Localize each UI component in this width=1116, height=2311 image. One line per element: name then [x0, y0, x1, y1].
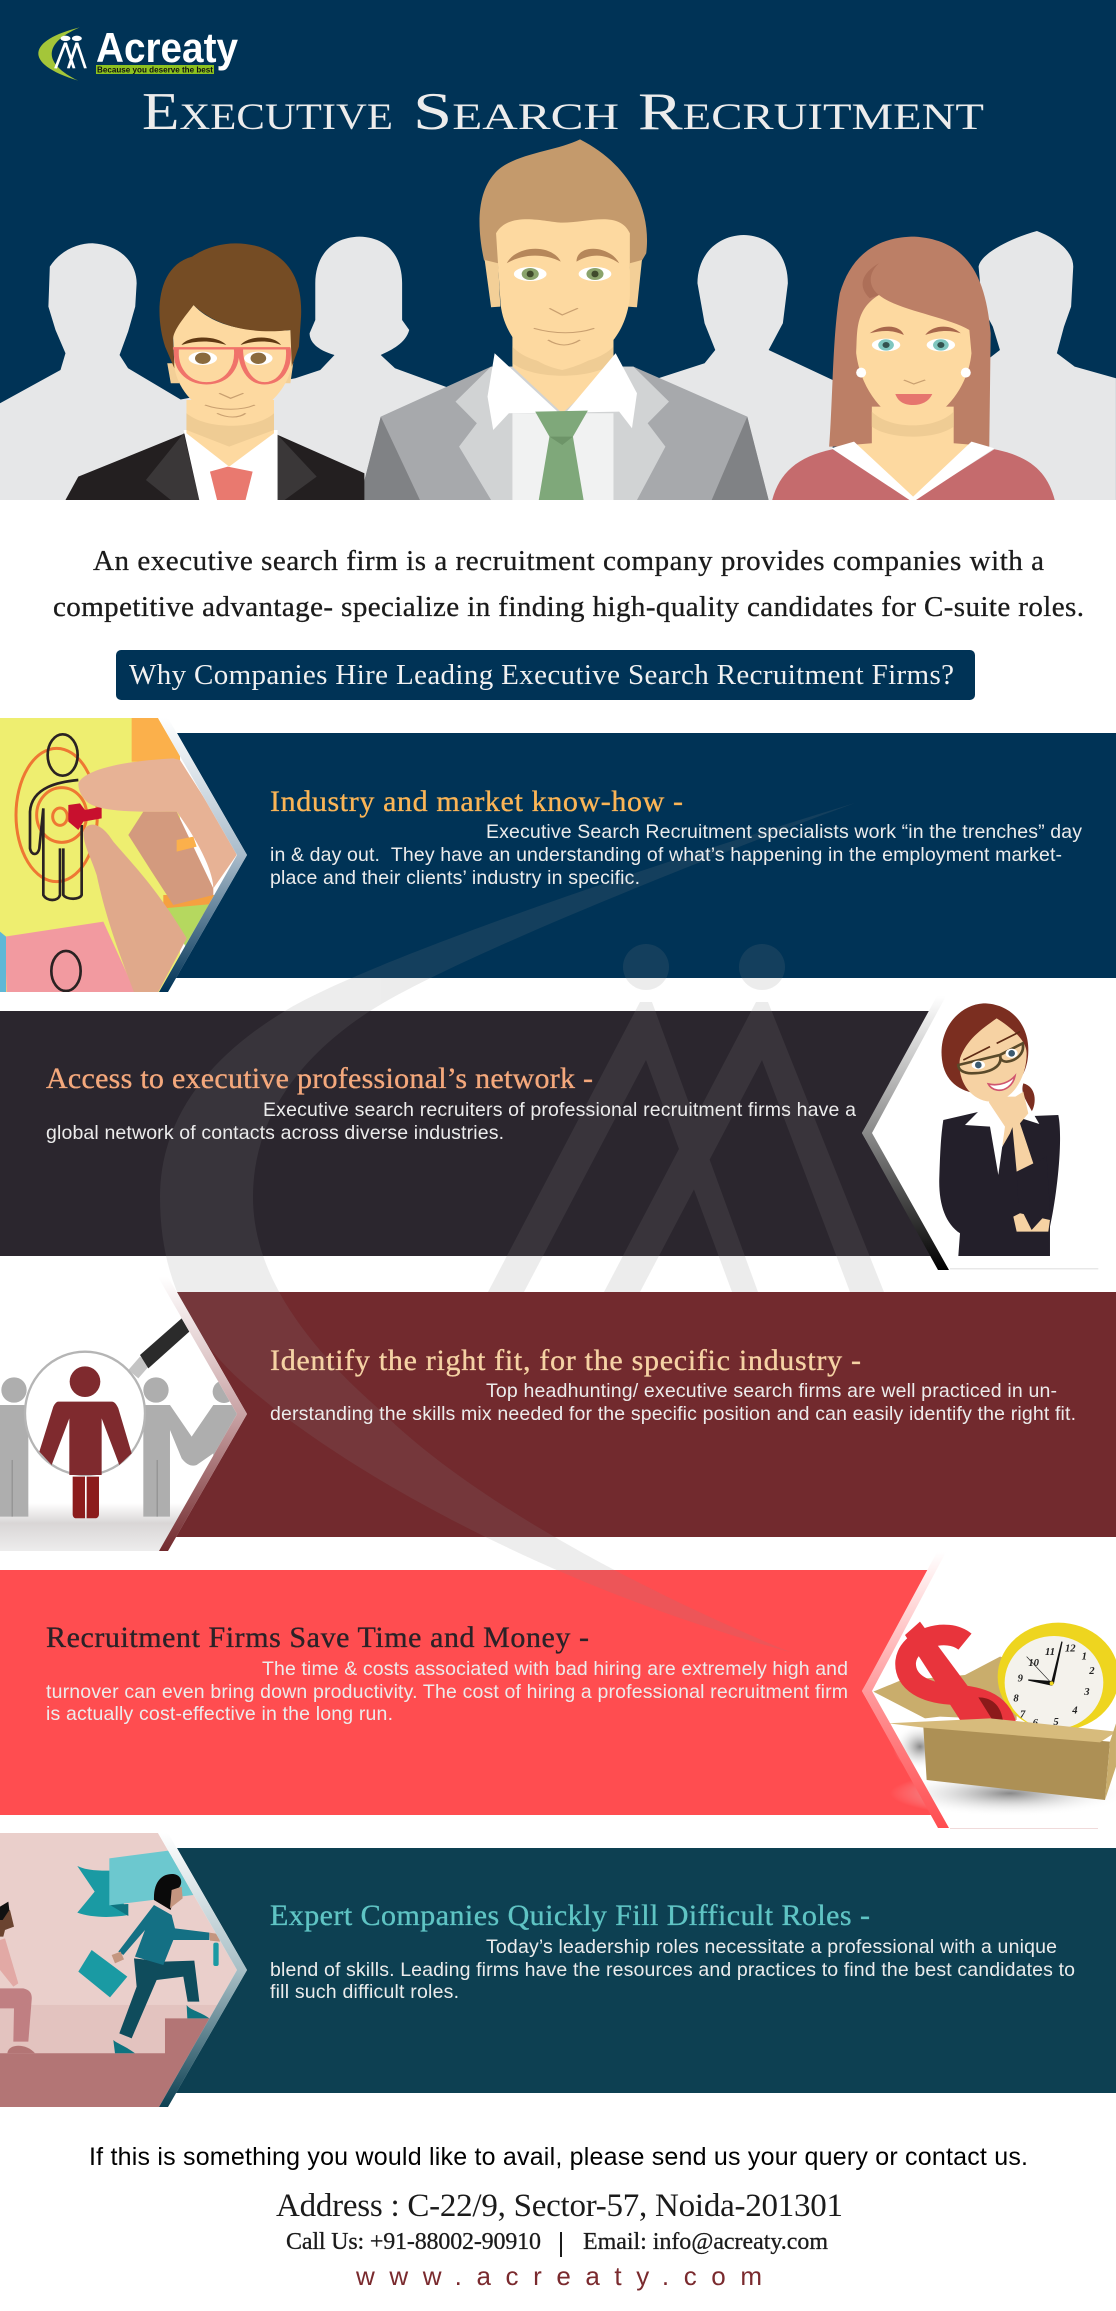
image: dollar and clock in box: 10: [1028, 1658, 1040, 1669]
panel 4: save time and money: [46, 1552, 1116, 1829]
body text: is actually cost-effective in the long run.: [46, 1703, 393, 1725]
body text: blend of skills. Leading firms have the resources and practices to find the best candidates to: [270, 1959, 1075, 1981]
chevron stripe: [158, 1833, 247, 2107]
image: dollar and clock in box: 3: [1083, 1687, 1090, 1698]
heading: Expert Companies Quickly Fill Difficult Roles -: [270, 1899, 870, 1932]
panel 3: right fit: [0, 1277, 1076, 1560]
body text: [270, 821, 1082, 889]
logo: [38, 24, 239, 81]
title: Executive: [142, 83, 393, 141]
panel 2: executive network: [46, 996, 1098, 1270]
title: [142, 83, 984, 141]
panel 5: fill difficult roles: [0, 1830, 1075, 2110]
image: dollar and clock in box: 7: [1020, 1709, 1026, 1720]
image: dollar and clock in box: 1: [1082, 1651, 1087, 1662]
body text: [46, 1099, 856, 1144]
image: dollar and clock in box: 6: [1033, 1718, 1039, 1729]
image: dollar and clock in box: 2: [1088, 1666, 1095, 1677]
body text: Executive Search Recruitment specialists work “in the trenches” day: [486, 821, 1082, 843]
body text: [270, 1936, 1075, 2003]
heading: Recruitment Firms Save Time and Money -: [46, 1621, 589, 1654]
body text: Top headhunting/ executive search firms are well practiced in un-: [486, 1380, 1057, 1402]
logo: Acreaty: [96, 24, 239, 71]
subheading button: [116, 650, 975, 700]
image: dollar and clock in box: 5: [1053, 1717, 1059, 1728]
footer call to action: If this is something you would like to avail, please send us your query or contact us.: [89, 2143, 1028, 2171]
watermark logo: [160, 803, 884, 1652]
logo: Because you deserve the best: [97, 66, 213, 74]
footer contact details: Call Us: +91-88002-90910: [286, 2229, 541, 2255]
image: dollar and clock in box: 8: [1013, 1694, 1019, 1705]
title: Recruitment: [638, 83, 984, 141]
image: magnifier over figures: [0, 1318, 237, 1551]
center man: [359, 139, 769, 500]
image: dollar and clock in box: 11: [1045, 1647, 1055, 1658]
background silhouettes: [0, 231, 1116, 500]
chevron stripe: [862, 996, 949, 1270]
image: climbing businesswoman: [0, 1830, 247, 2110]
intro text: An executive search firm is a recruitment company provides companies with a: [93, 545, 1044, 577]
body text: in & day out. They have an understanding of what’s happening in the employment market-: [270, 844, 1062, 866]
image: hand pinning target: [0, 715, 237, 995]
header banner: [0, 0, 1116, 501]
footer contact details: Email: info@acreaty.com: [583, 2229, 828, 2255]
heading: Identify the right fit, for the specific industry -: [270, 1344, 861, 1377]
chevron stripe: [158, 718, 247, 992]
image: dollar and clock in box: 9: [1018, 1674, 1024, 1685]
body text: derstanding the skills mix needed for the specific position and can easily identify the right fit.: [270, 1403, 1076, 1425]
heading: Industry and market know-how -: [270, 785, 683, 818]
chevron stripe: [158, 1277, 247, 1551]
panel bands: [0, 733, 1116, 2093]
intro text: [53, 545, 1084, 623]
website address: www.acreaty.com: [355, 2261, 762, 2291]
body text: fill such difficult roles.: [270, 1981, 459, 2003]
body text: Executive search recruiters of professional recruitment firms have a: [263, 1099, 856, 1121]
intro text: competitive advantage- specialize in finding high-quality candidates for C-suite roles.: [53, 591, 1084, 623]
body text: [46, 1658, 848, 1725]
image: dollar and clock in box: [873, 1622, 1116, 1817]
panel 1: industry know-how: [0, 715, 1082, 995]
body text: The time & costs associated with bad hiring are extremely high and: [262, 1658, 848, 1680]
chevron stripe: [862, 1552, 949, 1828]
woman: [772, 237, 1055, 501]
image: thinking woman: [939, 1003, 1098, 1269]
image: dollar and clock in box: 12: [1065, 1644, 1076, 1655]
body text: Today’s leadership roles necessitate a professional with a unique: [486, 1936, 1057, 1958]
divider rule under image: [950, 1828, 1098, 1829]
body text: [270, 1380, 1076, 1425]
image: dollar and clock in box: 4: [1071, 1705, 1078, 1716]
heading: Access to executive professional’s network -: [46, 1062, 593, 1095]
body text: turnover can even bring down productivity. The cost of hiring a professional recruitment firm: [46, 1681, 848, 1703]
left man with glasses: [65, 243, 364, 500]
subheading button: Why Companies Hire Leading Executive Search Recruitment Firms?: [129, 659, 954, 691]
footer contact details: Address : C-22/9, Sector-57, Noida-201301: [276, 2188, 843, 2224]
body text: place and their clients’ industry in specific.: [270, 867, 640, 889]
body text: global network of contacts across diverse industries.: [46, 1122, 504, 1144]
footer contact details: [276, 2188, 843, 2257]
title: Search: [413, 83, 619, 141]
